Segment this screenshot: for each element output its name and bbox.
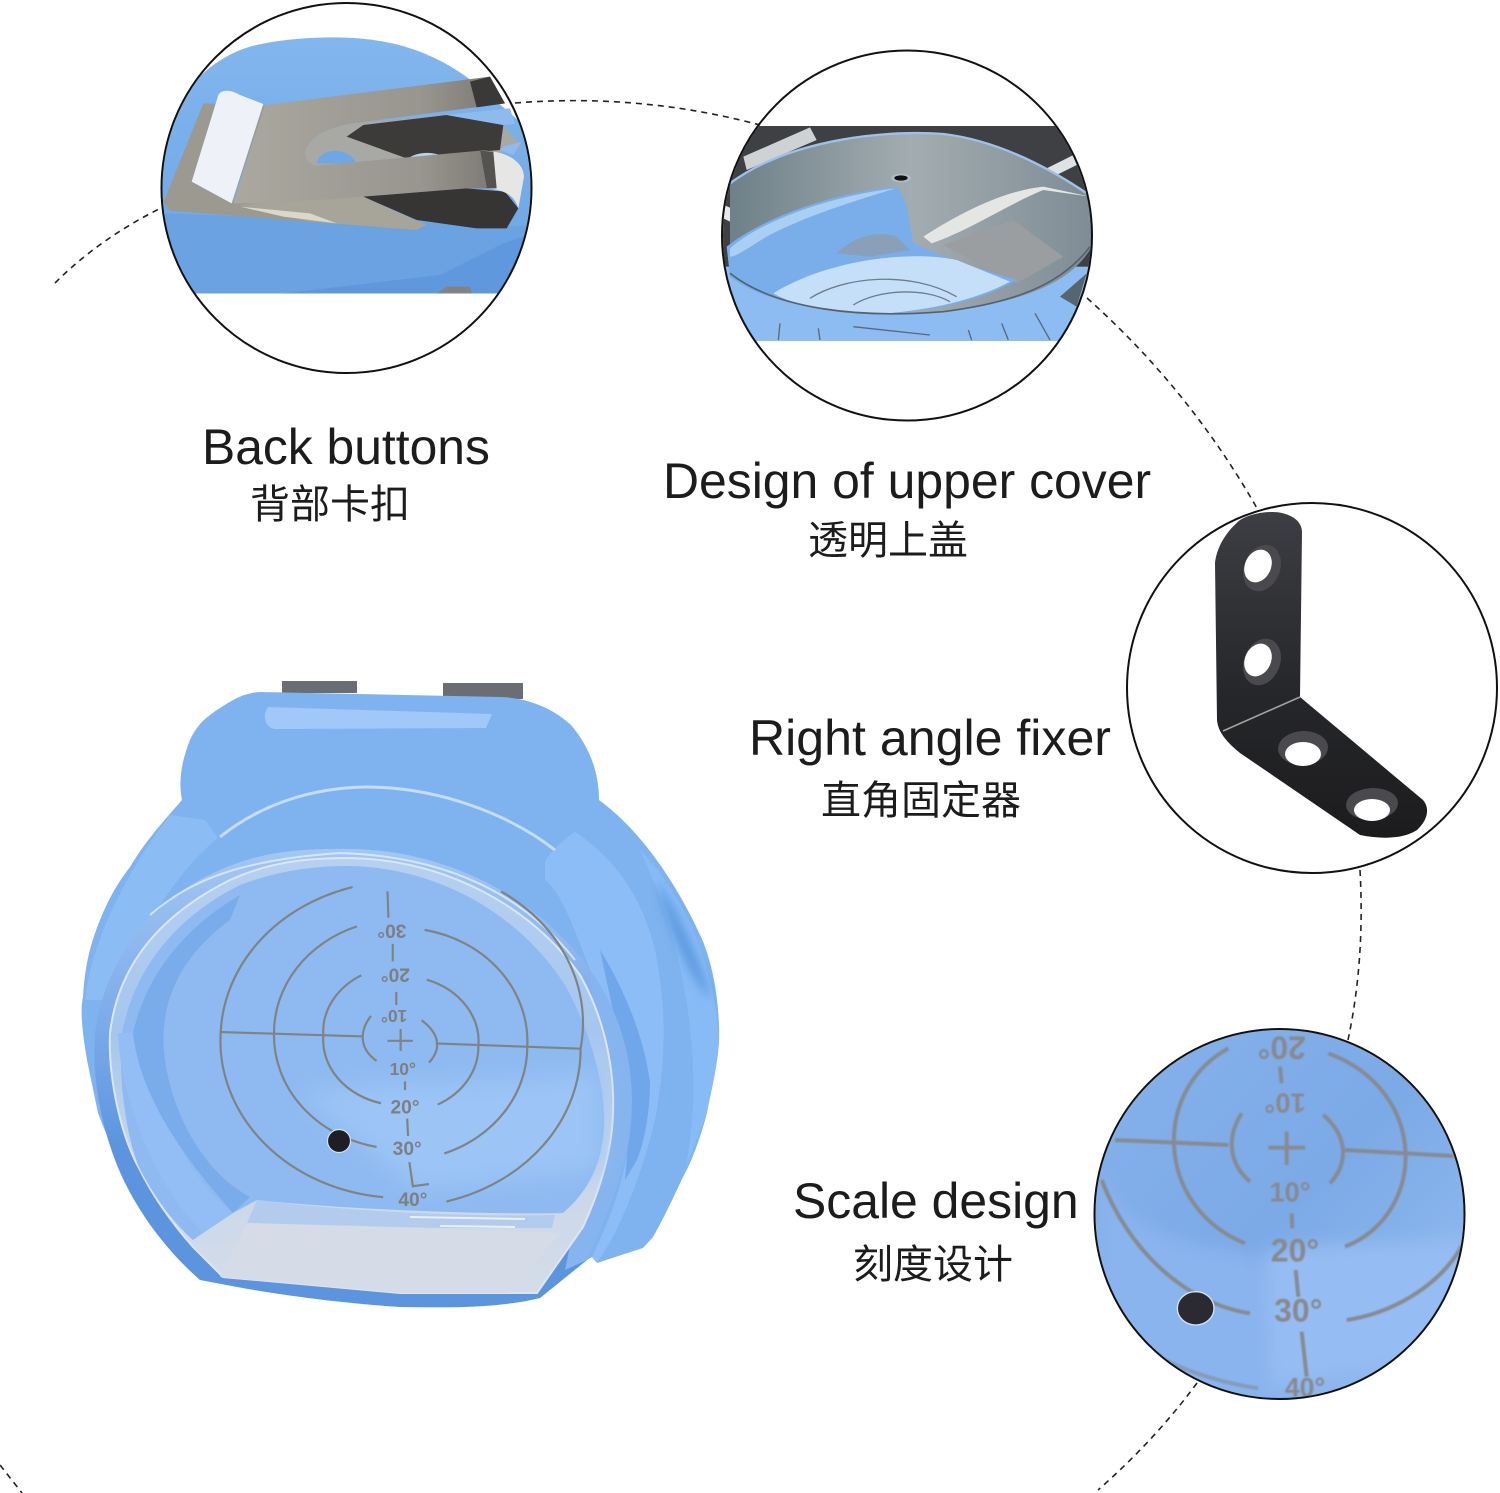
target scale: 20° — [381, 963, 410, 984]
bubble dot — [328, 1130, 350, 1152]
magnified scale: 20° — [1271, 1233, 1319, 1269]
target scale: 10° — [381, 1006, 407, 1026]
back lens rim — [220, 787, 555, 850]
label: Design of upper cover — [663, 453, 1151, 563]
panel: upper cover callout — [720, 50, 1097, 420]
label: Right angle fixer — [749, 710, 1111, 823]
target scale: 10° — [390, 1059, 416, 1079]
magnified scale: 30° — [1274, 1293, 1323, 1329]
target scale: 30° — [377, 920, 406, 941]
panel: right angle fixer callout — [1127, 503, 1497, 873]
circle outline — [1094, 1029, 1464, 1399]
label: Back buttons: Back buttons — [202, 419, 490, 475]
panel: back buttons callout — [160, 3, 533, 373]
circle outline — [1127, 503, 1497, 873]
label: Right angle fixer: 直角固定器 — [821, 779, 1021, 823]
circle outline — [722, 50, 1092, 420]
label: Scale design — [793, 1173, 1079, 1287]
right housing shading — [545, 832, 719, 1263]
photo: metal belt clip — [160, 37, 533, 293]
circle outline — [162, 3, 532, 373]
panel: scale design callout — [1092, 1027, 1468, 1403]
target scale: 20° — [390, 1097, 420, 1118]
top tab — [265, 707, 492, 729]
label: Design of upper cover: Design of upper cover — [663, 453, 1151, 509]
magnified scale — [1092, 1027, 1468, 1403]
blue housing — [82, 692, 719, 1298]
left side tab — [85, 815, 218, 1000]
magnified scale: 40° — [1285, 1373, 1325, 1403]
label: Back buttons — [202, 419, 490, 527]
magnified scale: 10° — [1269, 1177, 1311, 1208]
label: Scale design: 刻度设计 — [853, 1243, 1013, 1287]
label: Right angle fixer: Right angle fixer — [749, 710, 1111, 766]
metal clip tips — [282, 681, 523, 699]
target scale: 30° — [393, 1139, 422, 1160]
magnified scale: 20° — [1257, 1030, 1306, 1066]
label: Scale design: Scale design — [793, 1173, 1079, 1229]
label: Design of upper cover: 透明上盖 — [808, 519, 968, 563]
clear front lens — [94, 849, 632, 1307]
label: Back buttons: 背部卡扣 — [250, 483, 410, 527]
icon: black angle bracket — [1215, 512, 1427, 838]
target scale — [220, 887, 583, 1211]
magnified scale: 10° — [1264, 1087, 1306, 1118]
photo: transparent dome — [720, 126, 1097, 341]
main product: blue bubble level — [82, 681, 719, 1307]
target scale: 40° — [398, 1190, 427, 1211]
